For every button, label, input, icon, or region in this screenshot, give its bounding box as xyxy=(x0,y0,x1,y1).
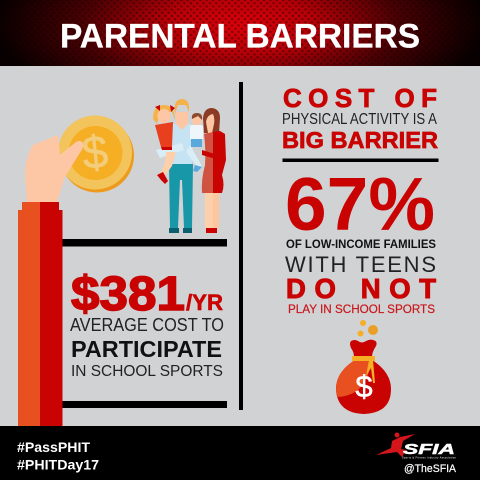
cost description: PARTICIPATE xyxy=(71,336,222,362)
heading: cost of physical activity xyxy=(282,83,438,153)
coin: $ xyxy=(79,125,110,179)
hashtags xyxy=(17,439,99,472)
bottom bar left xyxy=(62,401,227,408)
heading: cost of physical activity: BIG BARRIER xyxy=(282,127,438,153)
icon: family xyxy=(153,99,226,233)
statistic description: PLAY IN SCHOOL SPORTS xyxy=(288,304,435,316)
icon: hand holding coin xyxy=(18,116,134,426)
hashtags: #PHITDay17 xyxy=(17,456,99,472)
statistic: 67%: 67% xyxy=(285,162,435,246)
divider bars left xyxy=(62,239,227,246)
logo: SFIA: SFIA xyxy=(403,441,455,458)
hand xyxy=(25,135,83,202)
divider right xyxy=(282,158,438,162)
coins xyxy=(358,320,378,336)
cost description: AVERAGE COST TO xyxy=(70,315,224,335)
centre vertical divider xyxy=(239,82,243,410)
title: PARENTAL BARRIERS xyxy=(60,18,420,56)
icon: money bag xyxy=(336,320,391,414)
statistic description: WITH TEENS xyxy=(285,252,436,277)
statistic description: DO NOT xyxy=(286,273,436,304)
heading: cost of physical activity: PHYSICAL ACTIVITY IS A xyxy=(282,111,438,128)
logo: SFIA: Sports & Fitness Industry Association xyxy=(402,456,457,460)
cost figure: /YR xyxy=(186,290,223,315)
sleeve xyxy=(18,202,62,426)
icon: money bag: $ xyxy=(355,369,373,404)
hashtags: #PassPHIT xyxy=(17,439,90,455)
statistic description: OF LOW-INCOME FAMILIES xyxy=(286,239,436,251)
father xyxy=(156,99,202,233)
background panel xyxy=(0,66,480,426)
girl xyxy=(153,105,176,184)
mother xyxy=(202,108,226,233)
footer band xyxy=(0,426,480,480)
logo: SFIA xyxy=(376,432,457,475)
heading: cost of physical activity: COST OF xyxy=(283,83,437,113)
boy xyxy=(190,113,203,172)
header band xyxy=(0,0,480,66)
coin xyxy=(58,116,134,192)
cost description: IN SCHOOL SPORTS xyxy=(71,363,223,380)
logo: SFIA: @TheSFIA xyxy=(404,463,457,475)
cost description xyxy=(70,315,224,380)
cost figure: $381 xyxy=(71,268,185,321)
statistic description xyxy=(285,239,436,316)
